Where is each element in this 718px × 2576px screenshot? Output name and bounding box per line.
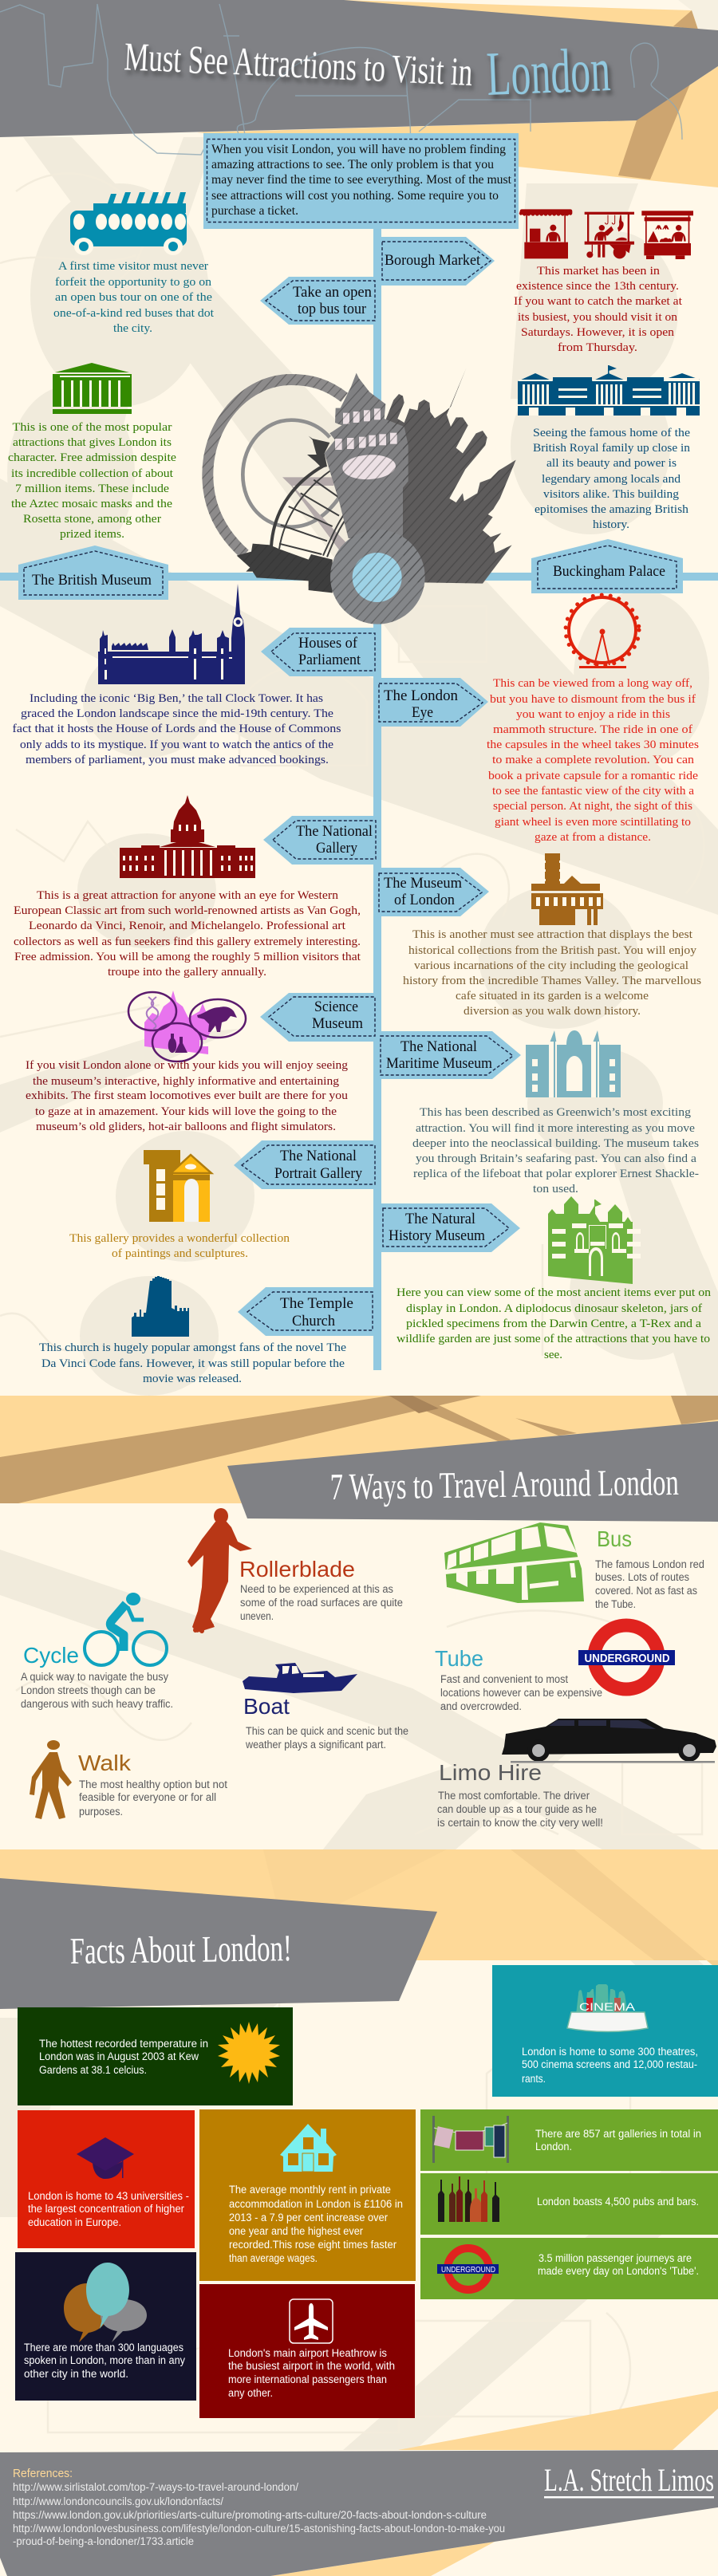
text: Science Museum: If you visit London alone or with your kids you will enjoy seeing	[26, 1059, 349, 1072]
fact panel: Heathrow	[199, 2284, 415, 2418]
text: Temple Church: Da Vinci Code fans. However, it was still popular before the	[41, 1357, 345, 1370]
icon: Science Museum	[128, 991, 246, 1062]
text: British Museum: its incredible collection of about	[11, 467, 174, 480]
fact panel: theatres and cinemas: London is home to some 300 theatres,	[522, 2046, 698, 2058]
text: British Museum	[8, 421, 176, 541]
text: Houses of Parliament: members of parliament, you must make advanced bookings.	[26, 754, 329, 766]
travel: Bus: The famous London red	[595, 1558, 704, 1570]
travel: Rollerblade: Need to be experienced at this as	[240, 1583, 393, 1595]
travel: Walk: purposes.	[79, 1806, 123, 1818]
text: Borough Market: its busiest, you should visit it on	[518, 311, 678, 324]
sign: Science Museum: Science	[314, 998, 358, 1015]
sign: Buckingham Palace	[531, 539, 683, 593]
travel: Tube: locations however can be expensive	[440, 1687, 602, 1699]
text: British Museum: character. Free admission despite	[8, 451, 176, 464]
sign: Natural History Museum: The Natural	[405, 1211, 475, 1227]
fact panel: rent: recorded.This rose eight times faster	[229, 2239, 396, 2251]
fact panel: art galleries	[420, 2109, 718, 2171]
text: National Gallery: This is a great attraction for anyone with an eye for Western	[37, 889, 339, 902]
icon: Natural History Museum	[548, 1196, 641, 1284]
text: London Eye: you want to enjoy a ride in this	[516, 708, 670, 721]
sign: National Portrait Gallery: The National	[280, 1148, 357, 1164]
sign: The Temple Church	[238, 1287, 373, 1336]
text: London Eye: but you have to dismount from the bus if	[490, 693, 696, 706]
travel: Rollerblade: Rollerblade	[239, 1557, 355, 1581]
fact panel: rent: one year and the highest ever	[229, 2225, 363, 2237]
icon: Museum of London	[531, 853, 603, 925]
references: http://www.sirlistalot.com/top-7-ways-to-travel-around-london/	[13, 2481, 298, 2493]
text: Natural History Museum	[396, 1286, 712, 1361]
sign: National Portrait Gallery: Portrait Gallery	[274, 1165, 362, 1182]
references: http://www.londonlovesbusiness.com/lifestyle/london-culture/15-astonishing-facts-about-london-to-make-you	[13, 2523, 505, 2535]
text: bus tour: one-of-a-kind red buses that dot	[53, 307, 215, 320]
text: National Gallery: Free admission. You will be among the roughly 5 million visitors that	[14, 951, 361, 963]
text: Science Museum: the museum’s interactive, highly informative and entertaining	[33, 1075, 340, 1088]
text: Buckingham Palace: history.	[593, 518, 629, 531]
text: Museum of London: history from the incredible Thames Valley. The marvellous	[403, 975, 701, 987]
sign: The Museum of London: The Museum	[384, 875, 462, 892]
fact panel: art galleries: London.	[535, 2141, 572, 2153]
text: London Eye: mammoth structure. The ride in one of	[493, 723, 692, 736]
text: Buckingham Palace: epitomises the amazing British	[535, 503, 689, 516]
travel: Tube: and overcrowded.	[440, 1700, 522, 1712]
travel: Limo Hire: The most comfortable. The driver	[438, 1790, 590, 1802]
text: Natural History Museum: Here you can view some of the most ancient items ever put on	[396, 1286, 712, 1299]
icon: open top bus	[70, 192, 187, 255]
sign: National Maritime Museum: Maritime Museum	[386, 1055, 492, 1072]
text: bus tour: forfeit the opportunity to go on	[55, 276, 212, 289]
text: Natural History Museum: display in London. A diplodocus dinosaur skeleton, jars of	[406, 1302, 702, 1315]
sign: Science Museum	[260, 993, 375, 1042]
icon: limousine	[502, 1719, 716, 1763]
text: London Eye: special person. At night, the sight of this	[493, 800, 692, 813]
text: Buckingham Palace: all its beauty and power is	[546, 457, 677, 470]
fact panel: art galleries: There are 857 art galleries in total in	[535, 2128, 701, 2140]
text: bus tour: A first time visitor must never	[58, 260, 208, 273]
sign: Houses of Parliament	[261, 628, 381, 676]
intro panel: amazing attractions to see. The only problem is that you	[211, 158, 494, 171]
fact panel: rent: accommodation in London is £1106 in	[229, 2198, 403, 2210]
fact panel: universities	[18, 2110, 195, 2248]
text: National Gallery: collectors as well as fun seekers find this gallery extremely interesting.	[14, 935, 361, 948]
sign: Science Museum: Museum	[312, 1015, 363, 1032]
text: bus tour: the city.	[113, 322, 152, 335]
sign: The British Museum	[18, 546, 168, 600]
references: https://www.london.gov.uk/priorities/arts-culture/promoting-arts-culture/20-facts-about-london-s-culture	[13, 2509, 487, 2521]
intro panel: see attractions will cost you nothing. Some require you to	[211, 189, 499, 203]
icon: double decker bus	[444, 1522, 584, 1603]
fact panel: Heathrow: the busiest airport in the world, with	[228, 2360, 395, 2372]
travel: Rollerblade	[239, 1557, 403, 1622]
footer panel	[0, 2450, 718, 2576]
text: Science Museum: museum’s old gliders, hot-air balloons and flight simulators.	[36, 1121, 336, 1133]
text: Natural History Museum: see.	[544, 1349, 562, 1361]
peach band: travel section	[0, 1396, 718, 1503]
text: London Eye: the capsules in the wheel takes 30 minutes	[487, 739, 699, 751]
sign: The Museum of London	[379, 868, 489, 916]
sign: The National Gallery	[263, 816, 376, 865]
icon: market stalls	[519, 209, 693, 259]
fact panel: languages: spoken in London, more than in any	[24, 2354, 185, 2366]
travel: Walk: feasible for everyone or for all	[79, 1791, 216, 1803]
text: British Museum: prized items.	[60, 528, 124, 541]
travel: Walk: The most healthy option but not	[79, 1778, 227, 1790]
travel: Limo Hire: is certain to know the city very well!	[437, 1817, 603, 1829]
sign: The Museum of London: of London	[394, 892, 455, 908]
travel: Bus	[595, 1526, 704, 1610]
icon: Buckingham Palace	[518, 365, 700, 416]
travel: Limo Hire: Limo Hire	[439, 1760, 542, 1785]
text: National Portrait Gallery: of paintings and sculptures.	[112, 1247, 248, 1260]
text: National Maritime Museum: attraction. You will find it more interesting as you move	[416, 1122, 695, 1135]
references: References:	[13, 2467, 73, 2480]
text: Museum of London: diversion as you walk down history.	[464, 1005, 641, 1018]
text: British Museum: This is one of the most popular	[13, 421, 172, 434]
sign: National Maritime Museum	[381, 1031, 521, 1079]
icon: Temple Church	[132, 1276, 189, 1337]
sign: Houses of Parliament: Parliament	[298, 652, 361, 668]
travel: Bus: buses. Lots of routes	[595, 1571, 689, 1583]
sign: National Maritime Museum: The National	[400, 1038, 477, 1055]
text: National Maritime Museum: deeper into the neoclassical building. The museum takes	[412, 1137, 699, 1150]
fact panel: theatres and cinemas: CINEMA	[579, 2000, 636, 2013]
text: National Gallery: Leonardo da Vinci, Renoir, and Michelangelo. Professional art	[29, 920, 346, 932]
fact panel: temperature: London was in August 2003 at Kew	[39, 2050, 199, 2062]
text: Buckingham Palace: Seeing the famous home of the	[533, 427, 690, 439]
fact panel: languages: There are more than 300 languages	[24, 2342, 183, 2353]
text: National Maritime Museum: you through Britain’s seafaring past. You can also find a	[416, 1152, 696, 1165]
sign: Natural History Museum: History Museum	[389, 1227, 485, 1244]
text: National Maritime Museum: ton used.	[533, 1183, 578, 1195]
text: Houses of Parliament: Including the iconic ‘Big Ben,’ the tall Clock Tower. It has	[30, 692, 323, 705]
icon: rollerblader	[187, 1508, 252, 1633]
travel: Bus: the Tube.	[595, 1598, 636, 1610]
top peach ribbon	[197, 0, 718, 187]
text: National Portrait Gallery: This gallery provides a wonderful collection	[69, 1232, 290, 1245]
title banner	[0, 0, 718, 160]
text: National Gallery: troupe into the gallery annually.	[108, 966, 266, 979]
fact panel: pubs and bars	[420, 2173, 718, 2235]
travel: Cycle: dangerous with such heavy traffic.	[21, 1698, 173, 1710]
fact panel: universities: the largest concentration of higher	[28, 2203, 184, 2215]
icon: Underground roundel	[578, 1625, 675, 1689]
text: Houses of Parliament: graced the London landscape since the mid-19th century. The	[21, 707, 333, 720]
text: bus tour: an open bus tour on one of the	[55, 291, 212, 304]
text: Temple Church	[39, 1341, 346, 1385]
title: Must See Attractions to Visit in	[124, 33, 474, 94]
sign: open top bus tour: top bus tour	[298, 301, 367, 317]
text: National Maritime Museum: replica of the lifeboat that polar explorer Ernest Shackle-	[413, 1168, 699, 1180]
references: -proud-of-being-a-londoner/1733.article	[13, 2535, 194, 2547]
fact panel: temperature	[18, 2007, 293, 2105]
fact panel: languages: other city in the world.	[24, 2368, 128, 2380]
sign: Borough Market: Borough Market	[385, 252, 481, 269]
title: London	[485, 34, 612, 108]
text: Houses of Parliament: fact that it hosts the House of Lords and the House of Commons	[13, 723, 341, 735]
fact panel: rent: than average wages.	[229, 2252, 318, 2264]
intro panel: may never find the time to see everything. Most of the must	[211, 173, 512, 187]
text: London Eye: This can be viewed from a long way off,	[493, 677, 692, 690]
travel: Bus: Bus	[597, 1526, 632, 1551]
fact panel: universities: London is home to 43 universities -	[28, 2190, 189, 2202]
icon: British Museum	[53, 363, 132, 414]
fact panel: languages	[15, 2252, 196, 2401]
sign: The National Gallery: The National	[296, 823, 373, 840]
text: London Eye: to make a complete revolution. You can	[492, 754, 695, 766]
travel: Cycle: A quick way to navigate the busy	[21, 1671, 168, 1683]
fact panel: Heathrow: any other.	[228, 2387, 273, 2399]
sign: National Portrait Gallery	[234, 1140, 375, 1189]
text: National Maritime Museum: This has been described as Greenwich’s most exciting	[420, 1106, 692, 1119]
peach band: facts section	[0, 1849, 718, 1970]
sign: The British Museum: The British Museum	[32, 572, 152, 589]
sign: The Temple Church: Church	[292, 1313, 335, 1329]
fact panel: Heathrow: more international passengers than	[228, 2373, 387, 2385]
sign: The National Gallery: Gallery	[316, 840, 357, 857]
fact panel: theatres and cinemas: 500 cinema screens and 12,000 restau-	[522, 2058, 697, 2070]
travel: Tube: Fast and convenient to most	[440, 1673, 568, 1685]
references: http://www.londoncouncils.gov.uk/londonfacts/	[13, 2495, 223, 2507]
fact panel: theatres and cinemas	[492, 1965, 718, 2097]
text: Museum of London: This is another must see attraction that displays the best	[412, 928, 693, 941]
footer peach ribbon	[270, 2391, 718, 2576]
text: Temple Church: movie was released.	[143, 1373, 242, 1385]
fact panel: temperature: Gardens at 38.1 celcius.	[39, 2064, 147, 2076]
text: Borough Market: If you want to catch the market at	[514, 295, 683, 308]
fact panel: tube journeys: 3.5 million passenger journeys are	[538, 2252, 692, 2264]
sign: The London Eye	[379, 678, 488, 727]
fact panel: tube journeys: UNDERGROUND	[441, 2266, 495, 2275]
fact panel: rent: The average monthly rent in private	[229, 2184, 391, 2196]
text: London Eye	[487, 677, 699, 844]
icon: walker	[30, 1740, 72, 1819]
sign: open top bus tour	[260, 277, 375, 325]
text: Science Museum	[26, 1059, 349, 1133]
text: Houses of Parliament	[13, 692, 341, 766]
icon: National Maritime Museum	[526, 1030, 621, 1097]
text: Museum of London: cafe situated in its garden is a welcome	[456, 990, 649, 1002]
text: Buckingham Palace	[533, 427, 690, 531]
sign: The London Eye: Eye	[412, 704, 433, 721]
text: Buckingham Palace: visitors alike. This building	[543, 488, 680, 501]
fact panel: universities: education in Europe.	[28, 2216, 121, 2228]
text: Natural History Museum: pickled specimens from the Darwin Centre, a T-Rex and a	[406, 1318, 701, 1330]
text: Houses of Parliament: only adds to its mystique. If you want to watch the antics of the	[20, 739, 333, 751]
icon: Houses of Parliament	[98, 584, 245, 684]
fact panel: rent: 2013 - a 7.9 per cent increase over	[229, 2212, 388, 2223]
text: Borough Market	[514, 265, 683, 354]
text: National Gallery	[14, 889, 361, 979]
travel: Rollerblade: some of the road surfaces are quite	[240, 1597, 403, 1609]
travel: Boat	[243, 1694, 408, 1751]
sign: open top bus tour: Take an open	[293, 284, 372, 301]
text: Borough Market: existence since the 13th century.	[516, 280, 679, 293]
icon: National Gallery	[120, 795, 255, 878]
travel: Boat: weather plays a significant part.	[245, 1739, 386, 1751]
fact panel: rent	[199, 2109, 416, 2281]
heading banner: Facts About London: Facts About London!	[69, 1928, 292, 1972]
sign: The Temple Church: The Temple	[280, 1295, 353, 1312]
travel: Walk	[78, 1751, 227, 1818]
text: Science Museum: to gaze at in amazement. Your kids will love the going to the	[35, 1105, 337, 1118]
fact panel: tube journeys: made every day on London's 'Tube'.	[538, 2265, 699, 2277]
text: London Eye: gaze at from a distance.	[535, 831, 651, 844]
travel: Tube: Tube	[435, 1646, 483, 1671]
text: London Eye: to see the fantastic view of the city with a	[492, 785, 694, 798]
text: National Maritime Museum	[412, 1106, 699, 1195]
travel: Limo Hire: can double up as a tour guide as he	[437, 1803, 597, 1815]
icon: boat	[243, 1663, 357, 1693]
travel: Boat: This can be quick and scenic but the	[246, 1725, 408, 1737]
sign: Houses of Parliament: Houses of	[298, 635, 358, 652]
text: National Portrait Gallery	[69, 1232, 290, 1260]
fact panel: Heathrow: London's main airport Heathrow is	[228, 2347, 387, 2359]
fact panel: tube journeys	[420, 2238, 718, 2299]
text: British Museum: the Aztec mosaic masks and the	[11, 498, 172, 510]
heading banner: 7 Ways to Travel Around London	[227, 1421, 718, 1522]
travel: Cycle: Cycle	[23, 1643, 79, 1668]
sign: Buckingham Palace: Buckingham Palace	[553, 563, 665, 580]
travel: Limo Hire	[437, 1760, 603, 1829]
travel: Tube	[435, 1646, 602, 1712]
central London collage	[207, 368, 516, 624]
text: Museum of London	[403, 928, 701, 1018]
text: bus tour	[53, 260, 215, 335]
text: Museum of London: historical collections from the British past. You will enjoy	[408, 944, 697, 957]
references	[13, 2467, 505, 2547]
intro panel	[203, 133, 519, 229]
intro panel: When you visit London, you will have no problem finding	[211, 143, 506, 156]
text: Natural History Museum: wildlife garden are just some of the attractions that you have to	[396, 1333, 710, 1345]
travel: Cycle	[21, 1643, 173, 1710]
text: Temple Church: This church is hugely popular amongst fans of the novel The	[39, 1341, 346, 1354]
text: Buckingham Palace: British Royal family up close in	[533, 442, 690, 455]
text: Buckingham Palace: legendary among locals and	[542, 473, 681, 486]
fact panel: temperature: The hottest recorded temperature in	[39, 2038, 208, 2050]
text: National Gallery: European Classic art from such world-renowned artists as Van Gogh,	[14, 904, 361, 917]
travel: Cycle: London streets though can be	[21, 1684, 156, 1696]
travel: Walk: Walk	[78, 1751, 132, 1775]
text: London Eye: book a private capsule for a romantic ride	[488, 770, 698, 782]
intro panel: purchase a ticket.	[211, 204, 298, 218]
icon: Underground roundel: UNDERGROUND	[584, 1652, 670, 1665]
text: British Museum: Rosetta stone, among other	[23, 513, 161, 526]
travel: Rollerblade: uneven.	[240, 1610, 274, 1622]
sign: Borough Market	[381, 237, 495, 286]
travel: Boat: Boat	[243, 1694, 290, 1719]
text: Science Museum: exhibits. The first steam locomotives ever built are there for you	[26, 1089, 349, 1102]
text: Museum of London: various incarnations of the city including the geological	[414, 959, 688, 972]
text: British Museum: attractions that gives London its	[13, 436, 172, 449]
text: Borough Market: from Thursday.	[558, 341, 637, 354]
text: Borough Market: Saturdays. However, it is open	[521, 326, 675, 339]
fact panel: pubs and bars: London boasts 4,500 pubs and bars.	[537, 2196, 699, 2208]
heading banner: Facts About London	[0, 1878, 437, 2009]
travel: Bus: covered. Not as fast as	[595, 1585, 697, 1597]
icon: cyclist	[85, 1593, 167, 1665]
text: London Eye: giant wheel is even more scintillating to	[495, 816, 691, 829]
fact panel: theatres and cinemas: rants.	[522, 2073, 546, 2085]
icon: National Portrait Gallery	[144, 1150, 211, 1222]
text: British Museum: 7 million items. These include	[15, 483, 169, 495]
sign: The London Eye: The London	[384, 687, 458, 704]
sign: Natural History Museum	[381, 1203, 520, 1252]
text: Borough Market: This market has been in	[537, 265, 661, 278]
icon: London Eye	[566, 595, 639, 668]
signpost pole	[0, 223, 718, 1370]
